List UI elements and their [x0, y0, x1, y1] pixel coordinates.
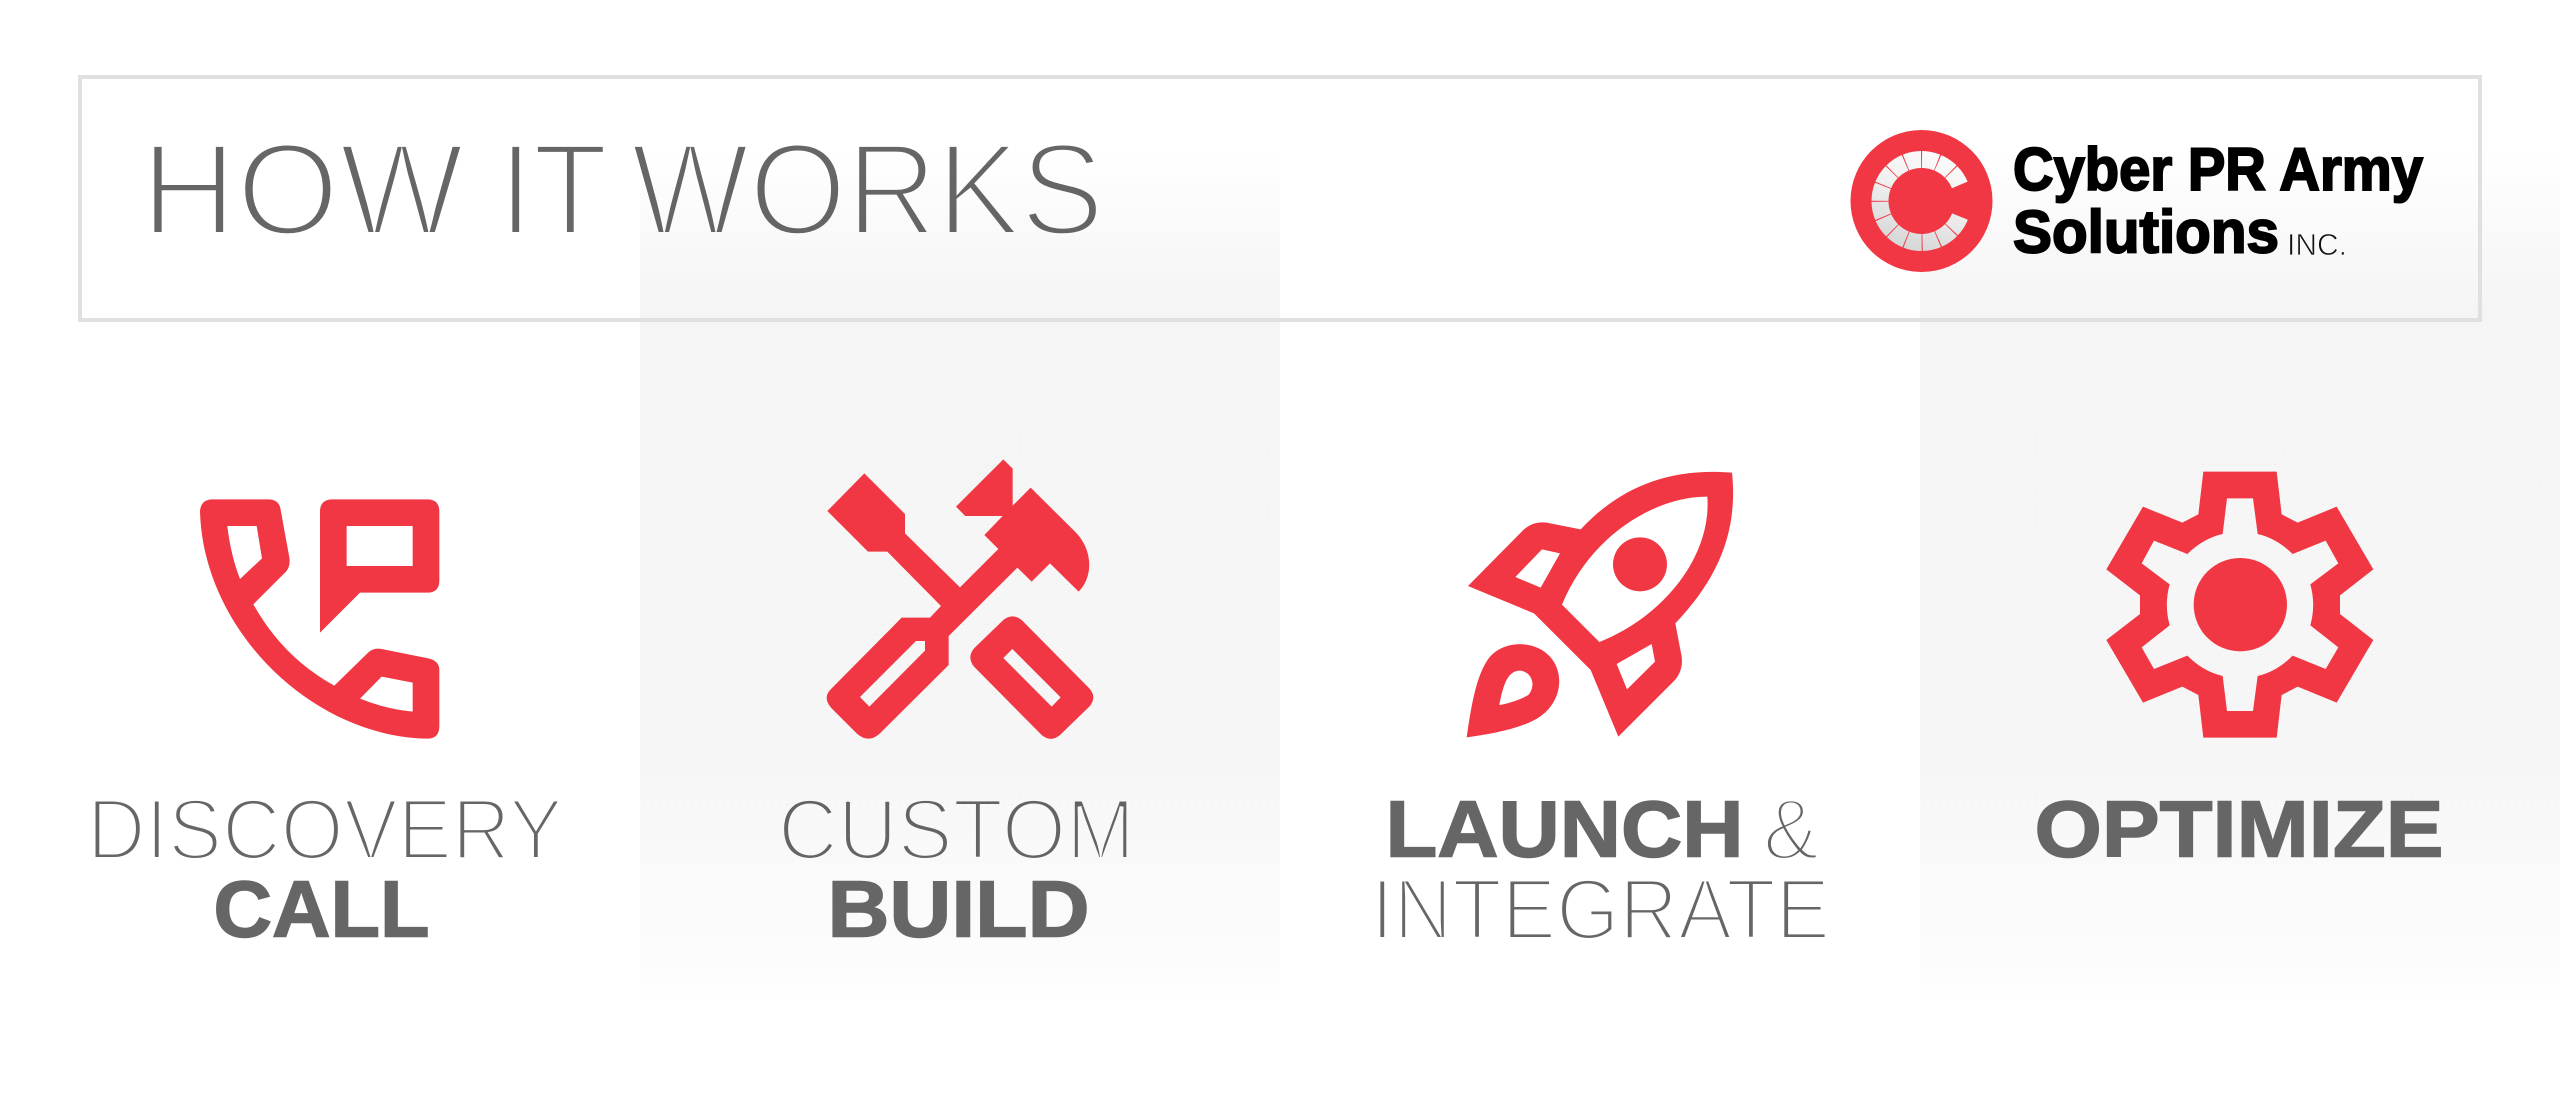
- label: custom build: [778, 782, 1135, 954]
- label: launch and integrate: [1371, 782, 1830, 958]
- panel: custom build: [778, 459, 1135, 954]
- label: discovery call: [87, 782, 563, 954]
- logo wordmark: [2013, 136, 2424, 266]
- icon: gear: [2106, 472, 2373, 738]
- icon: crossed hammer and screwdriver: [827, 459, 1093, 739]
- title: WORKS: [631, 116, 1104, 262]
- label: discovery call: DISCOVERY: [87, 782, 563, 878]
- label: custom build: CUSTOM: [778, 782, 1135, 878]
- icon: phone with speech bubble: [200, 499, 439, 739]
- icon: rocket: [1467, 472, 1733, 737]
- label: discovery call: CALL: [214, 864, 430, 954]
- label: launch and integrate: &: [1763, 782, 1819, 878]
- icon: logo circle with C ring: [1850, 130, 1992, 272]
- label: optimize: OPTIMIZE: [2034, 784, 2444, 874]
- title: HOW: [141, 116, 464, 262]
- logo: Cyber PR Army Solutions: [1850, 130, 2424, 272]
- panel: optimize: [2034, 472, 2444, 874]
- panel: header box: [80, 77, 2480, 320]
- logo suffix: INC.: [2287, 227, 2347, 262]
- logo wordmark: Solutions: [2013, 198, 2279, 266]
- label: launch and integrate: INTEGRATE: [1371, 862, 1830, 958]
- logo wordmark: Cyber PR Army: [2013, 136, 2424, 203]
- title: IT: [499, 116, 606, 262]
- panel: launch and integrate: [1371, 472, 1830, 958]
- label: custom build: BUILD: [828, 864, 1090, 954]
- label: launch and integrate: LAUNCH: [1386, 784, 1744, 874]
- panel: discovery call: [87, 499, 563, 954]
